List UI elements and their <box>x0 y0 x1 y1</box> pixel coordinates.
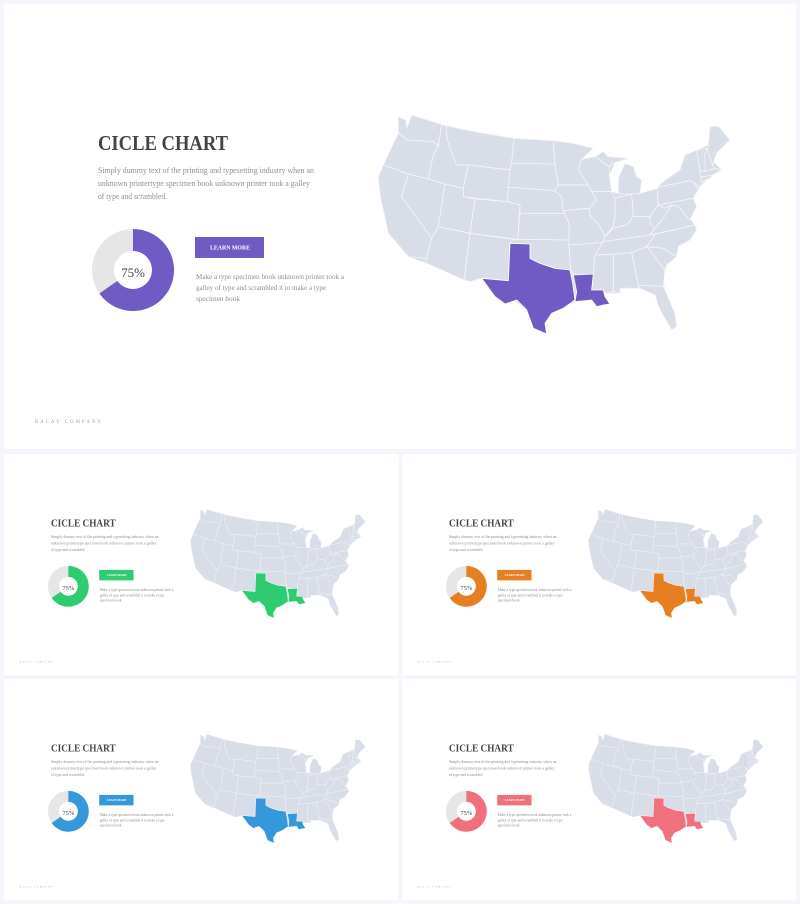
description text: unknown printertype specimen book unknown printer took a galley <box>98 178 311 188</box>
description text: unknown printertype specimen book unknown printer took a galley <box>51 541 157 546</box>
side note text: specimen book <box>100 824 122 828</box>
button: learn more <box>195 237 264 258</box>
button: learn more <box>99 795 134 805</box>
donut chart: 75%: 75% <box>121 265 145 280</box>
title: CICLE CHART <box>449 743 514 755</box>
description text <box>51 534 159 552</box>
panel: purple main slide <box>4 4 796 449</box>
side note text: galley of type and scrambled it to make a type <box>100 818 165 822</box>
button: learn more: LEARN MORE <box>107 573 127 577</box>
description text: Simply dummy text of the printing and typesetting industry when an <box>449 534 557 539</box>
donut chart: 75% <box>52 791 89 832</box>
description text: of type and scrambled. <box>449 547 483 552</box>
description text: of type and scrambled. <box>98 191 167 201</box>
description text <box>449 759 557 777</box>
description text: of type and scrambled. <box>449 772 483 777</box>
side note text <box>196 272 345 303</box>
side note text <box>100 813 174 828</box>
map: USA with Texas and Louisiana highlighted <box>378 115 730 334</box>
description text: Simply dummy text of the printing and typesetting industry when an <box>51 534 159 539</box>
side note text: galley of type and scrambled it to make a type <box>498 818 563 822</box>
map: USA with Texas and Louisiana highlighted <box>588 509 763 618</box>
description text <box>51 759 159 777</box>
description text <box>98 165 315 201</box>
panel: blue slide <box>4 679 398 900</box>
button: learn more: LEARN MORE <box>210 244 250 252</box>
side note text <box>100 588 174 603</box>
side note text: galley of type and scrambled it to make a type <box>498 593 563 597</box>
side note text: Make a type specimen book unknown printer took a <box>498 588 572 592</box>
title: CICLE CHART <box>449 518 514 530</box>
title: CICLE CHART <box>51 518 116 530</box>
side note text: Make a type specimen book unknown printer took a <box>498 813 572 817</box>
button: learn more: LEARN MORE <box>107 798 127 802</box>
side note text: Make a type specimen book unknown printer took a <box>196 272 345 281</box>
side note text <box>498 588 572 603</box>
footer brand: BALAY COMPANY <box>20 885 53 888</box>
side note text: specimen book <box>196 294 240 303</box>
map: USA with Texas and Louisiana highlighted <box>190 734 365 843</box>
description text: Simply dummy text of the printing and typesetting industry when an <box>449 759 557 764</box>
donut chart: 75%: 75% <box>62 810 75 817</box>
description text: of type and scrambled. <box>51 547 85 552</box>
side note text: galley of type and scrambled it to make a type <box>100 593 165 597</box>
description text: unknown printertype specimen book unknown printer took a galley <box>449 541 555 546</box>
donut chart: 75%: 75% <box>62 585 75 592</box>
map: USA with Texas and Louisiana highlighted <box>190 509 365 618</box>
button: learn more: LEARN MORE <box>505 573 525 577</box>
side note text: galley of type and scrambled it to make a type <box>196 283 327 292</box>
description text: Simply dummy text of the printing and typesetting industry when an <box>51 759 159 764</box>
footer brand: BALAY COMPANY <box>20 660 53 663</box>
description text <box>449 534 557 552</box>
description text: of type and scrambled. <box>51 772 85 777</box>
description text: unknown printertype specimen book unknown printer took a galley <box>449 766 555 771</box>
side note text <box>498 813 572 828</box>
map: USA with Texas and Louisiana highlighted <box>588 734 763 843</box>
description text: Simply dummy text of the printing and typesetting industry when an <box>98 165 315 175</box>
side note text: specimen book <box>100 599 122 603</box>
panel: pink slide <box>402 679 796 900</box>
footer brand: BALAY COMPANY <box>418 885 451 888</box>
title: CICLE CHART <box>98 131 229 155</box>
side note text: specimen book <box>498 824 520 828</box>
footer brand: BALAY COMPANY <box>418 660 451 663</box>
side note text: specimen book <box>498 599 520 603</box>
donut chart: 75% <box>450 566 487 607</box>
button: learn more <box>99 570 134 580</box>
button: learn more: LEARN MORE <box>505 798 525 802</box>
title: CICLE CHART <box>51 743 116 755</box>
footer brand: BALAY COMPANY <box>35 420 102 425</box>
button: learn more <box>497 795 532 805</box>
button: learn more <box>497 570 532 580</box>
donut chart: 75%: 75% <box>460 585 473 592</box>
donut chart: 75% <box>52 566 89 607</box>
donut chart: 75%: 75% <box>460 810 473 817</box>
side note text: Make a type specimen book unknown printer took a <box>100 813 174 817</box>
panel: orange slide <box>402 454 796 675</box>
side note text: Make a type specimen book unknown printer took a <box>100 588 174 592</box>
panel: green slide <box>4 454 398 675</box>
donut chart: 75% <box>99 229 174 311</box>
description text: unknown printertype specimen book unknown printer took a galley <box>51 766 157 771</box>
donut chart: 75% <box>450 791 487 832</box>
